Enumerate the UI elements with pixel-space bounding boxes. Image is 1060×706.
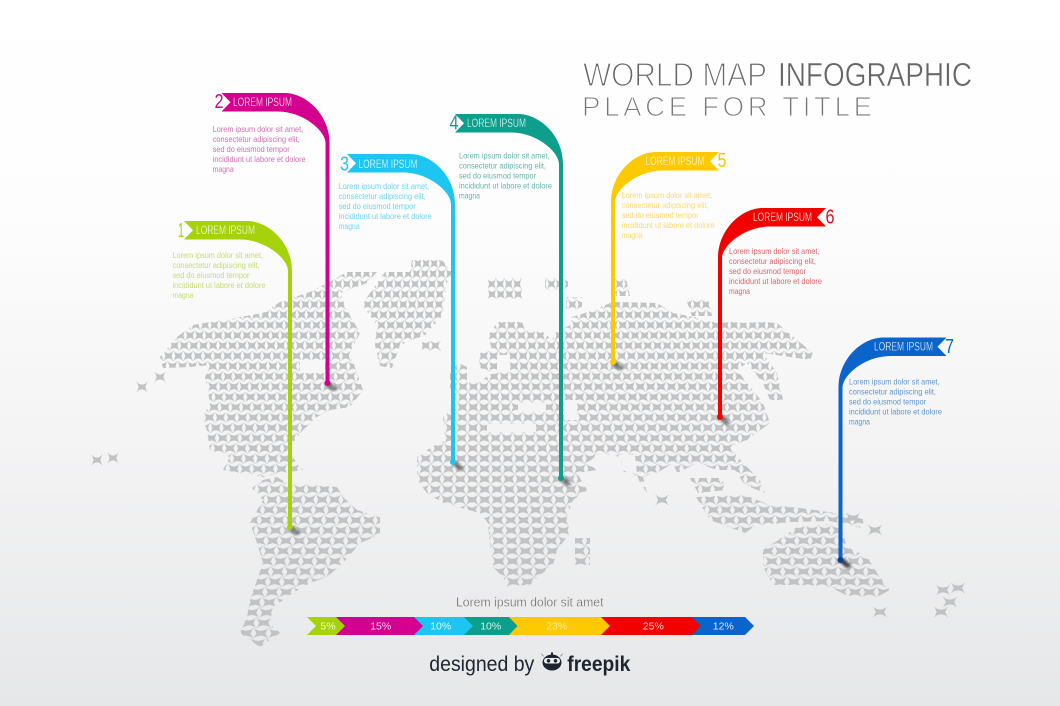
description: incididunt ut labore et dolore	[622, 220, 715, 230]
description: Lorem ipsum dolor sit amet,	[339, 181, 429, 191]
description: Lorem ipsum dolor sit amet,	[459, 150, 550, 160]
description: incididunt ut labore et dolore	[849, 406, 942, 416]
ribbon label: LOREM IPSUM	[196, 223, 255, 237]
freepik credit: designed by	[429, 653, 535, 676]
ribbon label: LOREM IPSUM	[358, 157, 418, 171]
description: magna	[849, 416, 870, 426]
pin 6: red	[717, 206, 834, 425]
ribbon label: LOREM IPSUM	[467, 116, 526, 130]
ribbon and stem	[718, 208, 826, 417]
description: consectetur adipiscing elit,	[459, 160, 546, 170]
description: magna	[339, 221, 360, 231]
ribbon label: LOREM IPSUM	[874, 340, 933, 354]
pin shadow	[719, 415, 731, 425]
description: consectetur adipiscing elit,	[849, 386, 936, 396]
description: incididunt ut labore et dolore	[339, 211, 432, 221]
percent labels: 23%	[546, 620, 567, 632]
description: magna	[172, 290, 194, 300]
pin head	[287, 524, 293, 530]
bar caption: Lorem ipsum dolor sit amet	[456, 594, 604, 610]
pin 3: cyan	[339, 154, 464, 470]
description: sed do eiusmod tempor	[213, 144, 290, 154]
pin 2: magenta	[213, 91, 338, 391]
description: consectetur adipiscing elit,	[339, 191, 426, 201]
description	[729, 246, 822, 296]
description: consectetur adipiscing elit,	[622, 200, 709, 210]
freepik credit: freepik	[567, 653, 631, 676]
description: sed do eiusmod tempor	[622, 210, 699, 220]
ribbon and stem	[838, 338, 946, 560]
description: magna	[213, 164, 234, 174]
percent labels: 12%	[713, 620, 734, 632]
description: incididunt ut labore et dolore	[459, 180, 552, 190]
pin head	[717, 414, 723, 420]
ribbon label: LOREM IPSUM	[233, 95, 292, 109]
description: incididunt ut labore et dolore	[172, 280, 266, 290]
description: sed do eiusmod tempor	[849, 396, 926, 406]
description: sed do eiusmod tempor	[172, 270, 250, 280]
title	[582, 57, 972, 122]
number: 5	[718, 150, 726, 172]
pin shadow	[560, 476, 572, 486]
percentage bar	[307, 617, 754, 635]
pin shadow	[289, 525, 301, 535]
percent labels: 10%	[480, 620, 501, 632]
description: Lorem ipsum dolor sit amet,	[172, 250, 263, 260]
pin head	[324, 380, 330, 386]
description: incididunt ut labore et dolore	[213, 154, 306, 164]
description	[339, 181, 432, 231]
pin 1: green	[172, 220, 301, 535]
description: magna	[459, 190, 480, 200]
number: 3	[340, 154, 349, 176]
description: Lorem ipsum dolor sit amet,	[849, 376, 940, 386]
description	[849, 376, 942, 426]
ribbon and stem	[611, 152, 719, 362]
description: Lorem ipsum dolor sit amet,	[622, 190, 712, 200]
ribbon label: LOREM IPSUM	[646, 154, 704, 168]
ribbon and stem	[347, 154, 455, 462]
description: consectetur adipiscing elit,	[213, 134, 300, 144]
percent labels	[320, 620, 734, 632]
description	[213, 124, 306, 174]
description: Lorem ipsum dolor sit amet,	[729, 246, 820, 256]
ribbon and stem	[455, 114, 563, 478]
description: sed do eiusmod tempor	[339, 201, 416, 211]
title: WORLD MAP	[583, 57, 767, 94]
ribbon and stem	[222, 93, 330, 383]
title: INFOGRAPHIC	[778, 57, 972, 94]
description: Lorem ipsum dolor sit amet,	[213, 124, 303, 134]
pin head	[450, 459, 456, 465]
pin 4: teal	[450, 112, 572, 486]
number: 4	[450, 112, 458, 134]
description: consectetur adipiscing elit,	[729, 256, 816, 266]
pin shadow	[612, 360, 624, 370]
percent labels: 25%	[643, 620, 664, 632]
pin shadow	[840, 558, 852, 568]
description: magna	[729, 286, 750, 296]
pin head	[558, 475, 564, 481]
number: 1	[178, 220, 184, 242]
percent labels: 15%	[370, 620, 391, 632]
ribbon and stem	[184, 221, 292, 527]
description	[622, 190, 715, 240]
pin 7: blue	[838, 336, 954, 568]
description: sed do eiusmod tempor	[459, 170, 536, 180]
percent labels: 10%	[430, 620, 451, 632]
number: 2	[214, 91, 224, 113]
world map dot lattice	[92, 260, 965, 646]
description: sed do eiusmod tempor	[729, 266, 806, 276]
pin shadow	[326, 381, 338, 391]
freepik credit	[429, 652, 631, 676]
description: consectetur adipiscing elit,	[172, 260, 260, 270]
description	[459, 150, 552, 200]
pin shadow	[452, 460, 464, 470]
pin head	[838, 557, 844, 563]
pin head	[610, 359, 616, 365]
description: magna	[622, 230, 643, 240]
number: 6	[826, 206, 834, 228]
title: PLACE FOR TITLE	[582, 91, 872, 122]
percent labels: 5%	[320, 620, 336, 632]
pin 5: yellow	[610, 150, 726, 370]
description	[172, 250, 266, 300]
ribbon label: LOREM IPSUM	[753, 210, 812, 224]
icon: freepik logo	[540, 652, 564, 670]
description: incididunt ut labore et dolore	[729, 276, 822, 286]
number: 7	[945, 336, 954, 358]
